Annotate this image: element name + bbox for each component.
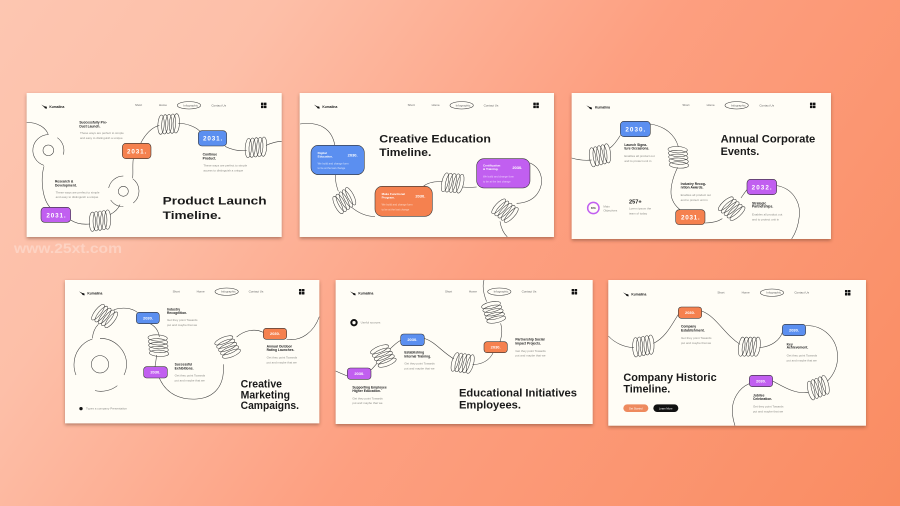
text block: continue product xyxy=(203,153,247,172)
navigation: Home xyxy=(469,289,477,293)
badge 2031 purple: 2031. xyxy=(46,212,66,219)
logo xyxy=(41,105,64,109)
navigation: Short xyxy=(445,289,452,293)
coil right xyxy=(243,136,269,158)
text block: research: These ways are perfect to simple xyxy=(56,190,100,194)
text block: launch: Launch Signa- xyxy=(624,143,647,147)
text block: awards: and to protect unit in xyxy=(681,198,708,202)
title xyxy=(459,387,577,411)
badge orange xyxy=(678,307,702,318)
logo: Kumalina xyxy=(631,293,646,297)
text block: achievement: Get they point Towards xyxy=(787,354,818,358)
badge blue xyxy=(782,324,806,336)
navigation: Short xyxy=(173,289,180,293)
button: black: Learn More xyxy=(659,406,673,410)
badge blue: 2030. xyxy=(407,337,417,342)
text block: supporting: Get they point Towards xyxy=(352,396,383,400)
badge purple: 2030. xyxy=(150,370,160,375)
text block: exhibitions: Internal Training. xyxy=(404,354,431,358)
text block: industry: put and maybe that we xyxy=(167,323,198,327)
badge 2030 blue xyxy=(620,121,650,137)
badge 2031 orange xyxy=(122,143,151,159)
circle: upper target xyxy=(33,135,64,165)
badge purple xyxy=(347,368,371,379)
text block: establishment xyxy=(681,325,712,345)
text block: awards: Industry Recog- xyxy=(681,182,706,186)
coil upper left xyxy=(89,301,120,331)
button: orange xyxy=(623,404,648,412)
title: Timeline. xyxy=(623,384,670,396)
text block: successful: Get they point Towards xyxy=(175,374,206,378)
text block: supporting: Higher Education. xyxy=(352,389,381,393)
text block: partnerships xyxy=(752,201,783,221)
badge purple: 2030. xyxy=(756,378,766,383)
text block: jubilee: Jubilee xyxy=(753,393,765,397)
badge purple xyxy=(749,375,773,387)
badge 2032 purple: 2032. xyxy=(752,184,772,191)
navigation: Home xyxy=(707,103,715,107)
text block: continue product: Continue xyxy=(203,153,217,157)
logo xyxy=(350,291,373,296)
badge orange: 2030. xyxy=(491,344,501,349)
text block: jubilee: Get they point Towards xyxy=(753,405,784,409)
title: Campaigns. xyxy=(241,400,299,412)
navigation: Contact Us xyxy=(211,103,227,107)
navigation xyxy=(408,102,499,109)
text block: successful: put and maybe that we xyxy=(175,379,205,383)
text block: research xyxy=(55,180,100,199)
text block: partnership: Impact Projects. xyxy=(515,341,541,345)
text block: partnerships: Partnerships. xyxy=(752,205,773,209)
text block: establishment: Establishment. xyxy=(681,328,705,332)
logo: Kumalina xyxy=(595,106,610,110)
watermark: www.25xt.com xyxy=(13,240,122,256)
timeline curve xyxy=(92,308,319,399)
coil right xyxy=(716,193,747,224)
navigation xyxy=(173,288,264,295)
text block: partnership: put and maybe that we xyxy=(515,354,546,358)
title: Creative Education xyxy=(379,134,491,146)
text block: achievement xyxy=(787,342,818,363)
navigation: Contact Us xyxy=(522,290,537,294)
panel: Educational Initiatives Employees xyxy=(336,280,593,424)
navigation: Infographic xyxy=(731,103,746,107)
footer note: Types a company Presentation xyxy=(86,407,127,411)
text block: research: Development. xyxy=(55,184,77,188)
title: Annual Corporate xyxy=(721,134,815,146)
navigation: Home xyxy=(197,289,205,293)
text block: annual: Annual Outdoor xyxy=(267,344,293,348)
navigation xyxy=(682,102,775,109)
button: orange: Get Started xyxy=(629,406,643,410)
logo: Kumalina xyxy=(49,105,64,109)
panel: Creative Education Timeline xyxy=(300,93,554,237)
title: Timeline. xyxy=(163,210,221,222)
text block: annual: put and maybe that we xyxy=(267,361,297,365)
card: orange: 2030. xyxy=(415,193,425,198)
text block: successful: Exhibitions. xyxy=(175,366,194,370)
icon: grid menu xyxy=(845,290,850,295)
text block: continue product: These ways are perfect to simple xyxy=(203,164,247,168)
text block: exhibitions xyxy=(404,351,435,371)
timeline curve xyxy=(572,124,800,239)
badge blue: 2030. xyxy=(143,315,153,320)
badge blue xyxy=(401,334,424,346)
coil right xyxy=(489,195,521,226)
coil top xyxy=(156,113,182,135)
navigation: Home xyxy=(432,103,440,107)
text block: partnerships: and to protect unit in xyxy=(752,217,779,221)
coil right xyxy=(803,374,833,401)
logo: Kumalina xyxy=(87,292,102,296)
coil left xyxy=(586,143,614,168)
navigation: Contact Us xyxy=(484,103,499,107)
text block: launch: ture Occasions. xyxy=(624,147,649,151)
card: purple: We build and change form xyxy=(483,174,515,178)
title: Events. xyxy=(721,146,759,158)
text block: launch: Enables all product out xyxy=(624,154,655,158)
donut stat xyxy=(588,202,618,214)
title: Educational Initiatives xyxy=(459,387,577,399)
navigation: Contact Us xyxy=(794,291,810,295)
card: orange: to be at the last change xyxy=(382,208,410,212)
coil top xyxy=(480,297,507,327)
text block: industry: Industry xyxy=(167,307,180,311)
timeline curve xyxy=(300,123,542,237)
text block: achievement: put and maybe that we xyxy=(787,359,817,363)
navigation: Infographic xyxy=(766,291,782,295)
coil right xyxy=(213,331,242,363)
badge 2031 orange: 2031. xyxy=(681,215,700,222)
stat 257+ xyxy=(629,200,652,215)
card: blue: Digital xyxy=(318,151,327,155)
navigation: Short xyxy=(135,103,142,107)
card: orange: We build and change form xyxy=(382,203,413,207)
text block: research: Research & xyxy=(55,180,74,184)
title: Timeline. xyxy=(379,147,431,159)
badge orange xyxy=(484,342,507,353)
navigation xyxy=(135,102,227,109)
text block: awards: nition Awards. xyxy=(681,185,703,189)
text block: partnerships: Enables all product out xyxy=(752,212,783,216)
logo xyxy=(79,291,102,296)
card: orange xyxy=(375,186,432,216)
icon: grid menu xyxy=(572,289,577,294)
title xyxy=(163,196,267,222)
text block: partnership: Get they point Towards xyxy=(515,349,546,353)
timeline curve xyxy=(27,122,282,224)
text block: partnership xyxy=(515,338,546,358)
text block: awards: Enables all product out xyxy=(681,193,711,197)
text block: pre-launch: Successfully Pre- xyxy=(79,121,107,125)
logo: Kumalina xyxy=(322,105,337,109)
logo xyxy=(586,105,610,110)
title: Company Historic xyxy=(623,372,717,384)
navigation: Infographic xyxy=(221,290,236,294)
timeline curve xyxy=(608,311,838,426)
navigation: Infographic xyxy=(456,103,471,107)
badge orange xyxy=(263,328,287,339)
coil middle xyxy=(449,351,476,375)
icon: grid menu xyxy=(299,289,304,294)
badge orange: 2030. xyxy=(685,310,695,315)
badge 2032 purple xyxy=(747,179,777,195)
badge 2031 blue xyxy=(198,131,227,146)
coil bottom xyxy=(87,209,113,232)
text block: successful: Successful xyxy=(175,363,192,367)
stat 257+: team of today xyxy=(629,211,648,215)
donut stat: Main xyxy=(603,204,610,208)
badge 2030 blue: 2030. xyxy=(625,126,646,133)
logo xyxy=(623,292,646,297)
card: purple: to be at the last change xyxy=(483,179,511,183)
logo: Kumalina xyxy=(358,292,373,296)
text block: jubilee: put and maybe that we xyxy=(753,409,784,413)
badge 2031 orange xyxy=(676,210,705,225)
circle: lower target xyxy=(109,176,139,207)
timeline curve xyxy=(336,280,502,376)
navigation: Short xyxy=(682,103,690,107)
text block: successful xyxy=(175,363,206,383)
stat 257+: Lorem ipsum the xyxy=(629,207,652,211)
text block: continue product: Product. xyxy=(203,157,216,161)
panel: Company Historic Timeline xyxy=(608,280,866,426)
card: purple xyxy=(477,159,530,188)
text block: establishment: Company xyxy=(681,325,696,329)
panel: Product Launch Timeline xyxy=(27,93,282,237)
text block: launch: and to protect unit in xyxy=(624,159,652,163)
icon: grid menu xyxy=(261,103,266,108)
circle target xyxy=(74,338,127,391)
badge orange: 2030. xyxy=(270,331,280,336)
navigation: Home xyxy=(159,103,167,107)
coil left xyxy=(329,185,360,216)
card: purple: & Training. xyxy=(483,167,499,171)
navigation: Contact Us xyxy=(249,290,264,294)
navigation: Contact Us xyxy=(759,103,775,107)
text block: establishment: put and maybe that we xyxy=(681,341,712,345)
card: blue: 2030. xyxy=(348,152,358,157)
text block: continue product: access to distinguish a unique xyxy=(203,168,243,172)
stat 257+: 257+ xyxy=(629,200,642,206)
text block: jubilee xyxy=(753,393,784,413)
text block: achievement: Key xyxy=(787,342,793,346)
icon and label: useful xyxy=(351,320,381,325)
text block: annual: Get they point Towards xyxy=(267,356,298,360)
coil middle xyxy=(737,337,761,357)
text block: awards xyxy=(681,182,711,202)
card: blue: to be at the last change xyxy=(318,166,346,170)
badge blue xyxy=(136,312,159,324)
text block: pre-launch xyxy=(79,121,124,140)
card: blue xyxy=(311,145,364,175)
text block: pre-launch: These ways are perfect to simple xyxy=(80,131,124,135)
text block: pre-launch: and easy to distinguish a unique xyxy=(80,136,123,140)
title: Product Launch xyxy=(163,196,267,208)
donut stat: Objectives xyxy=(603,208,618,212)
text block: establishment: Get they point Towards xyxy=(681,336,712,340)
coil left xyxy=(630,334,657,358)
text block: achievement: Achievement. xyxy=(787,346,808,350)
text block: industry: Recognition. xyxy=(167,311,187,315)
text block: partnerships: Strategic xyxy=(752,201,766,205)
navigation: Short xyxy=(717,290,725,294)
navigation xyxy=(717,289,810,296)
navigation: Infographic xyxy=(494,290,509,294)
icon and label: useful: Useful sources xyxy=(361,321,381,325)
badge 2031 orange: 2031. xyxy=(127,148,147,155)
badge purple: 2030. xyxy=(354,371,364,376)
text block: launch xyxy=(624,143,655,163)
donut stat: 60% xyxy=(591,208,597,210)
logo xyxy=(314,105,337,109)
title xyxy=(379,134,491,159)
text block: industry: Get they point Towards xyxy=(167,318,198,322)
icon: grid menu xyxy=(533,103,539,108)
text block: industry xyxy=(167,307,198,327)
text block: partnership: Partnership Social xyxy=(515,338,545,342)
title: Creative xyxy=(241,379,282,391)
button: black xyxy=(653,404,678,412)
title xyxy=(721,134,815,158)
text block: jubilee: Celebration. xyxy=(753,397,772,401)
coil middle xyxy=(440,172,466,194)
badge purple xyxy=(144,367,167,378)
coil vertical xyxy=(147,333,169,359)
badge 2031 blue: 2031. xyxy=(203,136,223,143)
text block: supporting: put and maybe that we xyxy=(352,401,383,405)
text block: exhibitions: put and maybe that we xyxy=(404,367,435,371)
text block: exhibitions: Get they point Towards xyxy=(404,362,435,366)
navigation: Short xyxy=(408,103,415,107)
card: orange: Program. xyxy=(382,195,395,199)
title: Marketing xyxy=(241,389,290,401)
panel: Annual Corporate Events xyxy=(572,93,831,239)
badge 2031 purple xyxy=(41,207,71,222)
card: orange: Make Functional xyxy=(382,192,405,196)
text block: exhibitions: Establishing xyxy=(404,351,424,355)
navigation: Infographic xyxy=(183,103,199,107)
text block: supporting xyxy=(352,385,387,405)
title: Employees. xyxy=(459,399,521,411)
title xyxy=(623,372,717,396)
title xyxy=(241,379,299,412)
card: purple: 2030. xyxy=(512,165,522,170)
coil vertical xyxy=(667,144,689,170)
text block: research: and easy to distinguish a unique xyxy=(56,195,99,199)
card: blue: Education. xyxy=(318,154,333,158)
text block: supporting: Supporting Employee xyxy=(352,385,387,389)
card: purple: Certification xyxy=(483,164,501,168)
panel: Creative Marketing Campaigns xyxy=(65,280,319,423)
text block: annual: Rating Launches. xyxy=(267,348,294,352)
text block: pre-launch: Duct Launch. xyxy=(79,125,100,129)
navigation: Home xyxy=(742,290,750,294)
coil left xyxy=(369,340,398,372)
text block: annual xyxy=(267,344,298,365)
card: blue: We build and change form xyxy=(318,161,349,165)
icon: grid menu xyxy=(810,103,815,108)
badge blue: 2030. xyxy=(789,327,799,332)
navigation xyxy=(445,288,537,295)
